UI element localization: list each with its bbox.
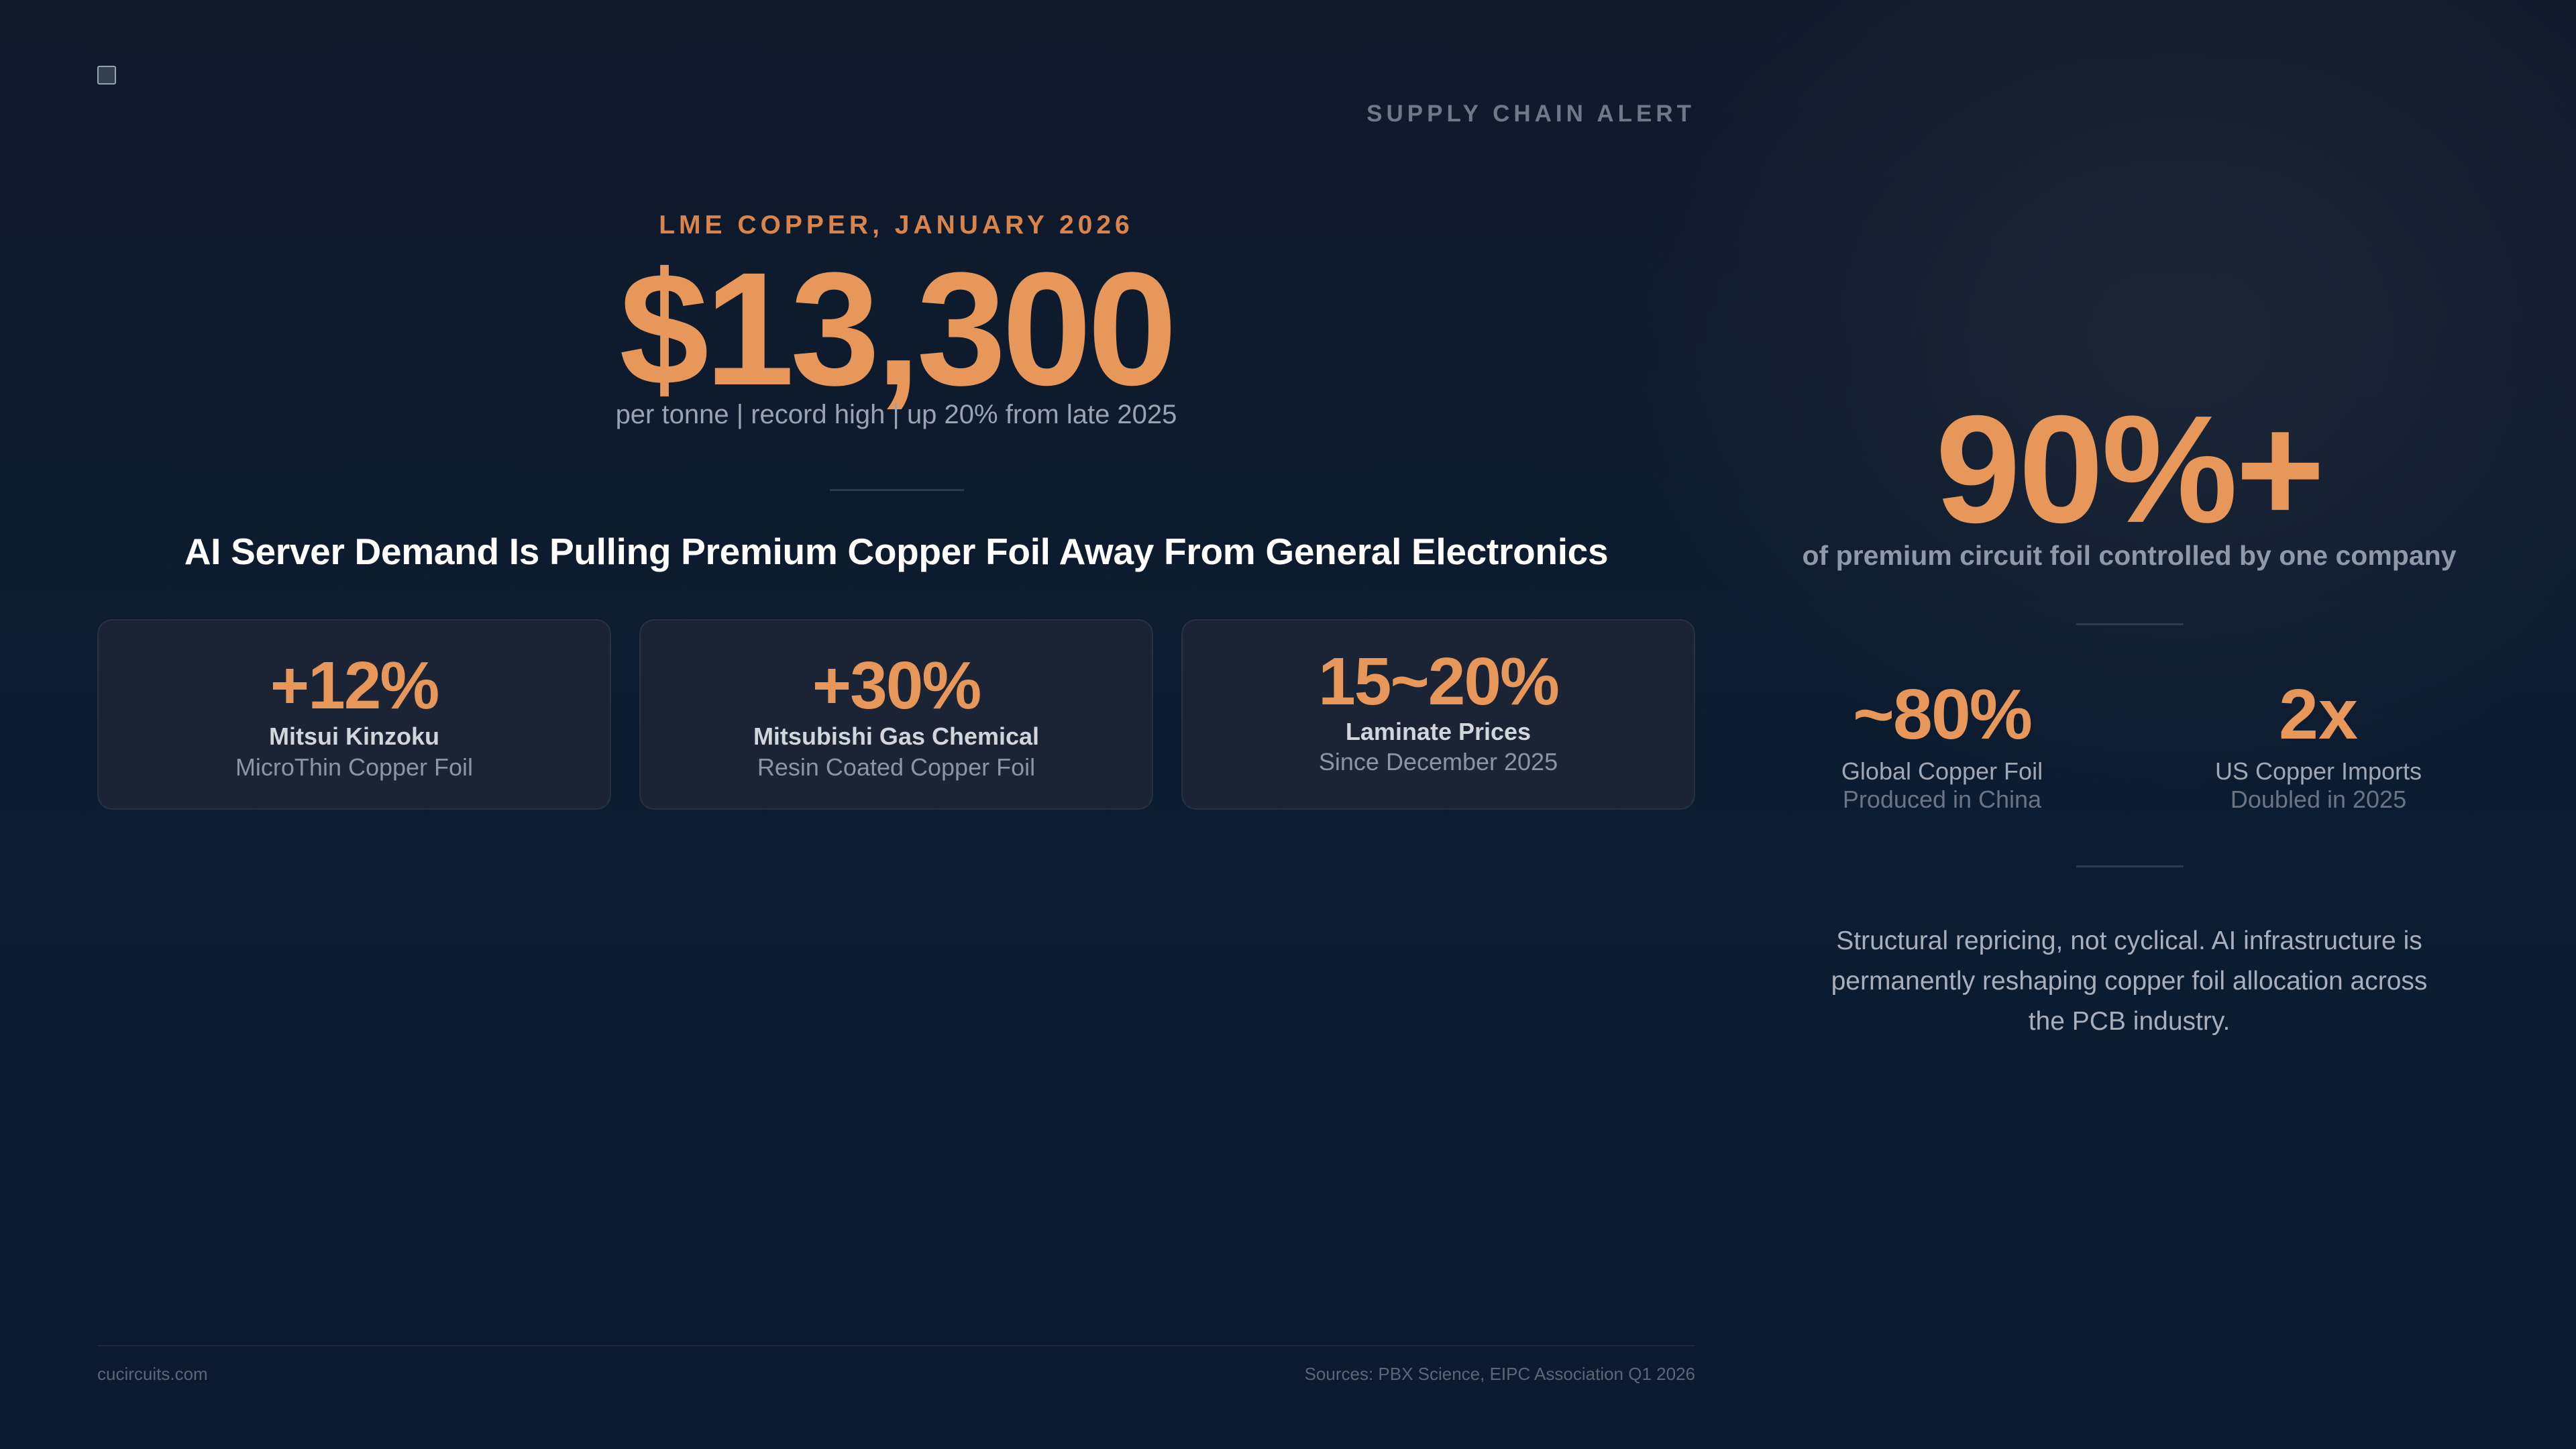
stat: 2x — [2215, 675, 2422, 813]
stat: ~80%: Global Copper Foil — [1841, 757, 2043, 785]
label: LME copper: LME COPPER, JANUARY 2026 — [659, 211, 1134, 239]
big stat caption: of premium circuit foil controlled by one company — [1802, 540, 2457, 571]
stat: ~80% — [1841, 675, 2043, 813]
stat: 2x: Doubled in 2025 — [2231, 786, 2406, 813]
footer: site: cucircuits.com — [97, 1364, 208, 1384]
card: Mitsui Kinzoku: MicroThin Copper Foil — [235, 753, 473, 781]
card: Mitsubishi Gas Chemical: Mitsubishi Gas Chemical — [753, 722, 1039, 750]
stat: ~80%: ~80% — [1853, 675, 2031, 754]
stat: ~80%: Produced in China — [1843, 786, 2041, 813]
big stat 90%+: 90%+ — [1935, 384, 2323, 555]
card: Mitsui Kinzoku: Mitsui Kinzoku — [269, 722, 439, 750]
card: Laminate prices: Since December 2025 — [1319, 748, 1558, 775]
card: Laminate prices: Laminate Prices — [1346, 718, 1531, 745]
card: Mitsubishi Gas Chemical: Resin Coated Copper Foil — [757, 753, 1035, 781]
card: Laminate prices: 15~20% — [1318, 644, 1558, 719]
card: Mitsui Kinzoku: +12% — [270, 648, 438, 723]
headline price: $13,300 — [619, 239, 1173, 419]
price subtitle: per tonne | record high | up 20% from late 2025 — [616, 400, 1177, 429]
logo placeholder — [97, 66, 116, 85]
footer: sources: Sources: PBX Science, EIPC Association Q1 2026 — [1305, 1364, 1695, 1384]
stat: 2x: US Copper Imports — [2215, 757, 2422, 785]
card: Laminate prices — [1181, 619, 1695, 810]
heading: AI Server Demand Is Pulling Premium Copper Foil Away From General Electronics — [184, 531, 1608, 572]
card: Mitsubishi Gas Chemical: +30% — [812, 648, 980, 723]
card: Mitsubishi Gas Chemical — [639, 619, 1153, 810]
closing paragraph: Structural repricing, not cyclical. AI infrastructure is permanently reshaping copper foil allocation across the PCB industry. — [1831, 926, 2427, 1036]
stat: 2x: 2x — [2279, 675, 2358, 754]
card: Mitsui Kinzoku — [97, 619, 611, 810]
eyebrow: supply chain alert: SUPPLY CHAIN ALERT — [1366, 101, 1695, 127]
